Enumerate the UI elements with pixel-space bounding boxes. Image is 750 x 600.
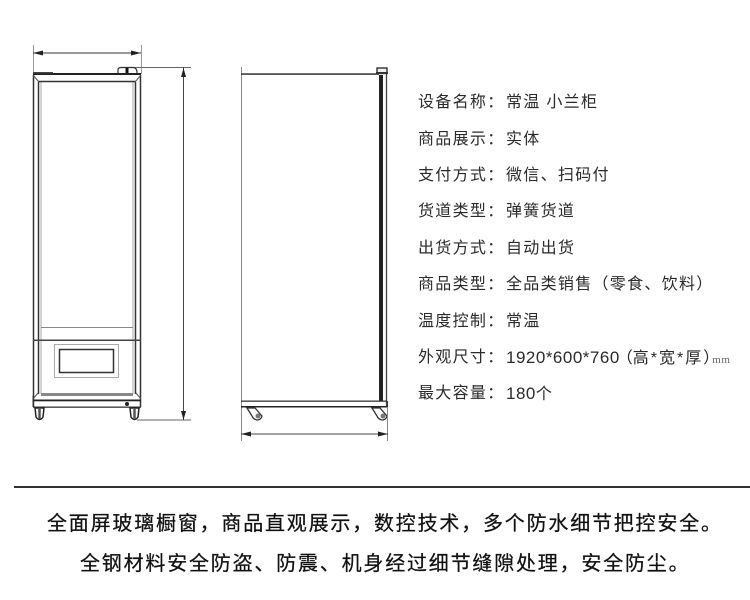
caption line 1: 全面屏玻璃橱窗，商品直观展示，数控技术，多个防水细节把控安全。 [47,513,723,535]
spec: channel: 弹簧货道 [506,203,575,220]
cabinet body [33,72,141,408]
width dimension [33,45,142,74]
spec: channel: 货道类型： [418,203,505,220]
spec: goods type: 全品类销售（零食、饮料） [506,276,714,293]
hinge [118,68,137,73]
spec: dimensions: 1920*600*760（高*宽*厚）mm [506,348,730,367]
spec: display [418,130,541,148]
drawing: side view of cabinet [241,67,388,441]
spec: payment [418,166,610,184]
divider [14,486,750,488]
spec: display: 实体 [506,131,541,148]
spec: device name: 设备名称： [418,94,505,111]
cabinet side body [241,67,388,441]
spec: device name: 常温 小兰柜 [506,94,598,111]
drawing: front view of cabinet [32,45,191,420]
top hinge [376,68,388,74]
spec: dispensing: 自动出货 [506,240,575,257]
spec: capacity [418,384,552,403]
spec: goods type [418,275,714,293]
spec: payment: 支付方式： [418,167,505,184]
display panel [54,344,118,378]
spec: dispensing [418,239,575,257]
spec: temperature: 常温 [506,313,541,330]
spec: goods type: 商品类型： [418,276,505,293]
caption line 2: 全钢材料安全防盗、防震、机身经过细节缝隙处理，安全防尘。 [80,553,690,575]
spec: dimensions: 外观尺寸： [418,349,505,366]
spec: capacity: 最大容量： [418,385,505,402]
spec: temperature: 温度控制： [418,313,505,330]
depth dimension [241,408,388,441]
spec: temperature [418,312,541,330]
height dimension [130,67,191,420]
casters [247,408,387,420]
spec: channel [418,202,575,220]
spec: device name [418,93,598,111]
spec: display: 商品展示： [418,131,505,148]
spec: capacity: 180个 [506,384,552,403]
spec list [418,93,730,403]
spec: payment: 微信、扫码付 [506,167,610,184]
spec: dispensing: 出货方式： [418,240,505,257]
casters [35,408,139,420]
